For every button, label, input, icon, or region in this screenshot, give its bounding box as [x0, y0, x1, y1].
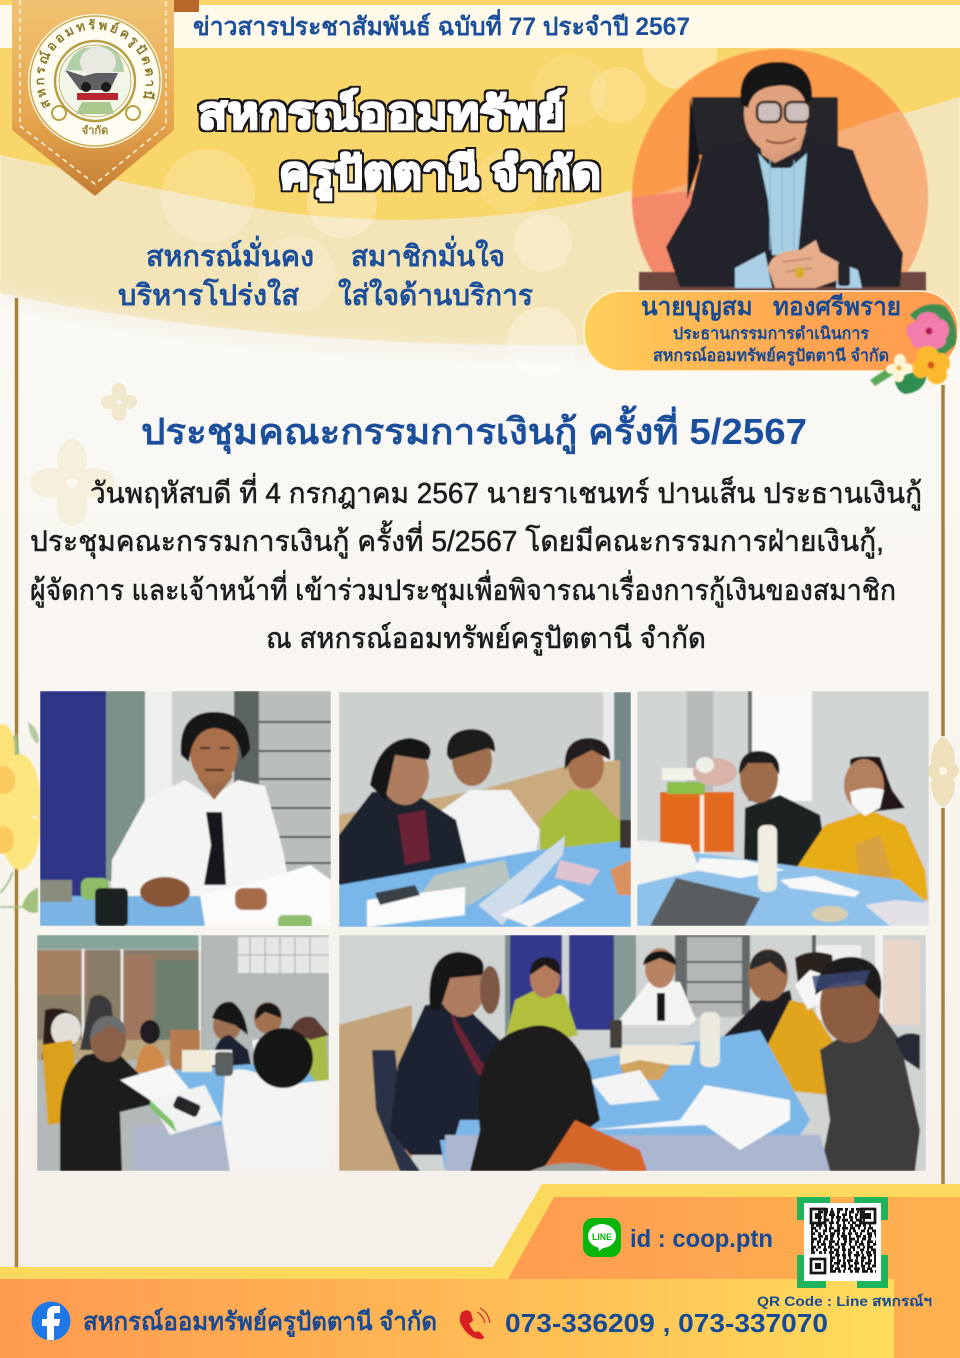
icon: tropical flowers [870, 304, 956, 394]
icon: LINE [583, 1218, 621, 1257]
main title: สหกรณ์ออมทรัพย์ [198, 88, 565, 138]
hands [768, 240, 838, 288]
tagline: สมาชิกมั่นใจ [351, 235, 505, 273]
tagline [118, 235, 533, 312]
body text [30, 473, 922, 656]
tagline: ใส่ใจด้านบริการ [338, 278, 533, 312]
icon: left yellow flower [0, 722, 42, 913]
photo: group seated around the table [339, 935, 926, 1171]
top banner strip [0, 0, 960, 48]
header background swooshes [0, 0, 960, 377]
tagline: บริหารโปร่งใส [118, 277, 299, 312]
body text: ผู้จัดการ และเจ้าหน้าที่ เข้าร่วมประชุมเพื่อพิจารณาเรื่องการกู้เงินของสมาชิก [30, 570, 896, 608]
jacket [666, 137, 903, 287]
ornament: right thai motif [927, 736, 959, 808]
banner text: ข่าวสารประชาสัมพันธ์ ฉบับที่ 77 ประจำปี 2567 [193, 9, 690, 41]
QR code [797, 1197, 888, 1288]
chairman title: ประธานกรรมการดำเนินการ [673, 324, 869, 343]
chairman nameplate [584, 291, 958, 371]
heading: meeting title: ประชุมคณะกรรมการเงินกู้ ครั้งที่ 5/2567 [141, 405, 807, 455]
body text: ประชุมคณะกรรมการเงินกู้ ครั้งที่ 5/2567 โดยมีคณะกรรมการฝ่ายเงินกู้, [30, 520, 884, 559]
photo: man and woman in yellow at table [637, 691, 929, 926]
line id: id : coop.ptn [630, 1225, 773, 1253]
chairman name: นายบุญสม ทองศรีพราย [641, 293, 901, 323]
ribbon badge with cooperative logo [12, 0, 199, 196]
logo seal: สหกรณ์ออมทรัพย์ครูปัตตานี [36, 18, 155, 108]
gold frame lines [16, 298, 943, 1267]
ornament: large thai motif [30, 439, 115, 526]
ornament: small thai motif [101, 383, 137, 421]
logo seal: จำกัด [82, 124, 108, 137]
cooperative name: สหกรณ์ออมทรัพย์ครูปัตตานี จำกัด [653, 346, 889, 367]
photo: three people reviewing documents [339, 692, 631, 927]
icon: LINE: LINE [592, 1232, 612, 1242]
shirt [758, 153, 807, 255]
icon: phone [460, 1308, 490, 1339]
body text: ณ สหกรณ์ออมทรัพย์ครูปัตตานี จำกัด [266, 622, 706, 656]
facebook page name: สหกรณ์ออมทรัพย์ครูปัตตานี จำกัด [83, 1307, 437, 1338]
icon: facebook [32, 1302, 70, 1340]
chairman portrait [631, 48, 929, 291]
QR caption: QR Code : Line สหกรณ์ฯ [757, 1293, 932, 1309]
body text: วันพฤหัสบดี ที่ 4 กรกฎาคม 2567 นายราเชนทร์ ปานเส็น ประธานเงินกู้ [90, 473, 922, 511]
photo: wide view of the meeting table [37, 935, 329, 1171]
photo: man in white shirt and black tie [40, 691, 331, 929]
tagline: สหกรณ์มั่นคง [146, 235, 314, 273]
phone numbers: 073-336209 , 073-337070 [505, 1308, 828, 1338]
main title [198, 88, 601, 200]
footer band [0, 1184, 960, 1358]
main title: ครูปัตตานี จำกัด [279, 149, 601, 200]
neck and face [758, 130, 806, 163]
logo seal [28, 14, 162, 148]
